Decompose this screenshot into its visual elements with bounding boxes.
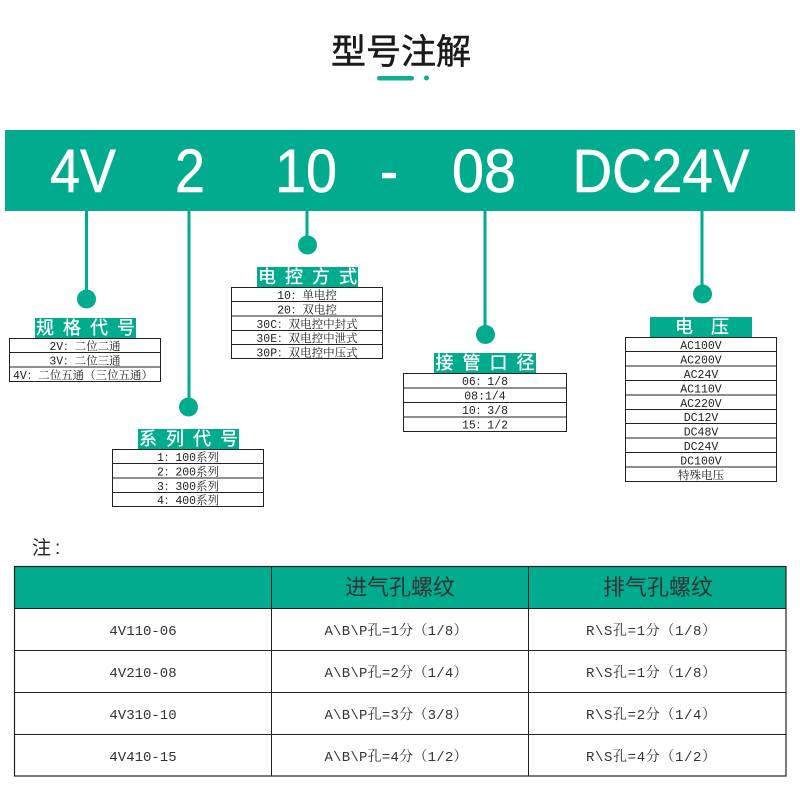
model code banner: DC24V: [572, 137, 750, 205]
panel: port size: 08:1/4: [464, 390, 506, 404]
panel: electric control type: 30C：双电控中封式: [256, 317, 358, 332]
panel: series code: [112, 429, 264, 508]
panel: voltage: AC200V: [680, 354, 722, 368]
thread table: [14, 566, 786, 776]
model code banner: 08: [452, 137, 516, 205]
panel: voltage: DC24V: [684, 441, 718, 454]
panel: voltage: AC24V: [684, 369, 718, 382]
panel: series code: 2：200系列: [157, 464, 219, 480]
table rows: R\S孔=1分（1/8）: [586, 664, 716, 682]
panel: voltage: DC100V: [680, 456, 722, 468]
panel: voltage: AC110V: [680, 384, 722, 396]
panel: port size: 接管口径: [436, 353, 544, 373]
panel: electric control type: 10：单电控: [277, 288, 337, 303]
panel: voltage: 压: [711, 317, 729, 337]
panel: port size: [404, 353, 566, 432]
model code banner: 4V: [50, 137, 116, 205]
panel: spec code: 4V：二位五通（三位五通）: [13, 369, 153, 383]
panel: voltage: DC48V: [684, 426, 718, 440]
model code banner: 10: [275, 137, 337, 205]
panel: spec code: [10, 318, 160, 383]
model code banner: 2: [175, 137, 205, 205]
connector lines and dots: [77, 210, 712, 416]
table rows: R\S孔=4分（1/2）: [586, 748, 716, 766]
panel: series code: 系列代号: [139, 429, 247, 449]
panel: voltage: 电: [675, 317, 693, 337]
panel: port size: 06：1/8: [462, 376, 508, 389]
table rows: A\B\P孔=4分（1/2）: [324, 748, 468, 766]
panel: voltage: DC12V: [684, 412, 718, 425]
table rows: 4V110-06: [109, 624, 177, 640]
model code banner: [5, 130, 795, 211]
title underline accent: [377, 76, 429, 80]
table rows: A\B\P孔=2分（1/4）: [324, 664, 468, 682]
table header: [345, 575, 713, 600]
panel: spec code: 3V：二位三通: [49, 354, 121, 368]
table rows: [109, 622, 716, 766]
title: 型号注解: [331, 33, 471, 72]
note label: 注:: [32, 537, 64, 559]
panel: electric control type: 电控方式: [258, 267, 366, 287]
panel: series code: 3：300系列: [157, 479, 219, 494]
model code banner: -: [380, 137, 398, 205]
panel: electric control type: [232, 267, 382, 360]
panel: electric control type: 20：双电控: [277, 302, 337, 318]
panel: series code: 4：400系列: [157, 493, 219, 508]
table rows: A\B\P孔=3分（3/8）: [324, 706, 468, 724]
panel: voltage: [626, 317, 776, 483]
table rows: A\B\P孔=1分（1/8）: [324, 622, 468, 640]
table rows: R\S孔=1分（1/8）: [586, 622, 716, 640]
table rows: R\S孔=2分（1/4）: [586, 706, 716, 724]
table header: 进气孔螺纹: [345, 575, 455, 600]
panel: voltage: 特殊电压: [678, 468, 724, 483]
table header: 排气孔螺纹: [603, 575, 713, 600]
panel: series code: 1：100系列: [157, 450, 219, 465]
panel: spec code: 2V：二位二通: [49, 340, 121, 354]
table rows: 4V310-10: [109, 708, 177, 724]
panel: port size: 15：1/2: [462, 420, 508, 432]
panel: electric control type: 30E：双电控中泄式: [256, 331, 358, 346]
table rows: 4V410-15: [109, 750, 177, 766]
panel: voltage: AC220V: [680, 398, 722, 411]
panel: port size: 10：3/8: [462, 405, 508, 418]
panel: spec code: 规格代号: [36, 318, 144, 338]
panel: electric control type: 30P：双电控中压式: [256, 346, 358, 360]
panel: voltage: AC100V: [680, 340, 722, 353]
table rows: 4V210-08: [109, 666, 177, 682]
